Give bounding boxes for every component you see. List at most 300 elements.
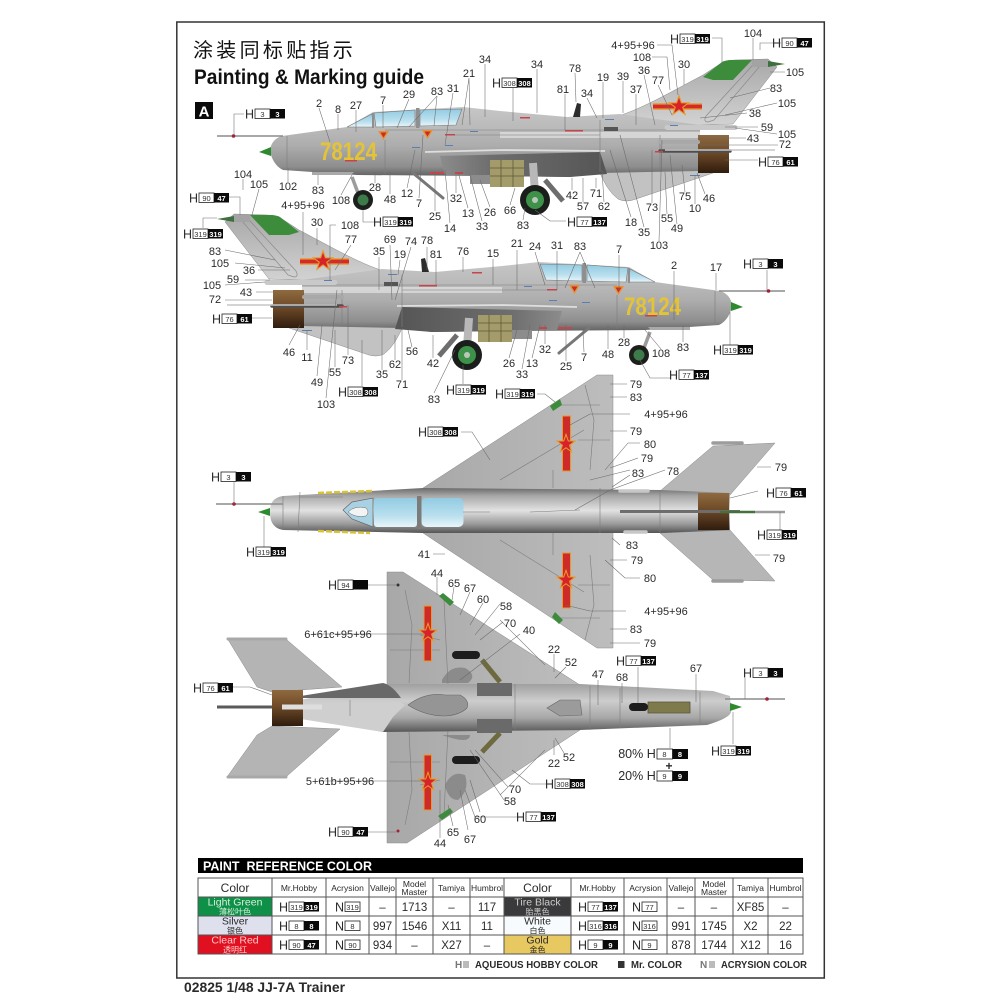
callout numbers side view 1: 49	[671, 223, 683, 235]
chip H308 side view 2: H	[338, 386, 347, 400]
table brand values: –	[678, 902, 685, 914]
chip H3 side view 1: 3	[260, 110, 265, 119]
section badge A: A	[199, 104, 210, 120]
chip H90 underside	[328, 826, 368, 840]
chip H319 fin: H	[670, 32, 679, 46]
chip H77 underside nose wheel: 137	[642, 657, 655, 666]
top view canopy	[343, 496, 464, 529]
callout numbers underside view: 47	[592, 669, 604, 681]
underside intake boxes	[477, 683, 512, 733]
table title bar	[198, 858, 803, 874]
callout numbers underside view: 67	[690, 663, 702, 675]
chip H308 top view: 308	[429, 428, 442, 437]
chip H3 top view: H	[211, 470, 220, 484]
colour names: Gold	[526, 934, 549, 946]
chip H3 underside: H	[743, 666, 752, 680]
chip H77 nose wheel side view 2: H	[669, 368, 678, 382]
callout numbers side view 1: 77	[652, 75, 664, 87]
callout numbers top view: 80	[644, 573, 656, 585]
table header: Mr.Hobby	[579, 883, 616, 893]
top view panel lines	[283, 488, 700, 533]
underside gear bay	[648, 702, 690, 713]
legend	[455, 960, 808, 971]
top view upper wing	[423, 375, 613, 490]
callout numbers side view 2: 103	[317, 399, 335, 411]
callout numbers underside view: 22	[548, 758, 560, 770]
footer product name: 02825 1/48 JJ-7A Trainer	[184, 979, 346, 995]
callout numbers side view 1: 27	[350, 100, 362, 112]
callout numbers underside view: 58	[500, 601, 512, 613]
callout numbers side view 2: 17	[710, 262, 722, 274]
callout numbers side view 1: 31	[447, 83, 459, 95]
colour names: 白色	[530, 926, 546, 936]
callout numbers side view 1: 105	[786, 67, 804, 79]
table Mr.Hobby chips: 9	[608, 941, 613, 950]
table brand values: X2	[743, 921, 758, 933]
chip H319 main wheel side view 2: 319	[457, 386, 470, 395]
callout numbers underside view: 52	[565, 657, 577, 669]
chip H3 side view 1: 3	[275, 110, 280, 119]
callout numbers side view 1: 25	[429, 211, 441, 223]
top view nose yellow marks	[318, 491, 372, 533]
table header: Humbrol	[471, 883, 503, 893]
colour names	[208, 896, 561, 954]
callout numbers side view 2: 48	[602, 349, 614, 361]
callout numbers side view 1	[279, 28, 804, 252]
chip H308 underside: H	[545, 778, 554, 792]
table header: Humbrol	[769, 883, 802, 893]
table Acrysion chips: N	[335, 920, 344, 934]
table Acrysion chips: 77	[645, 903, 654, 912]
chip H94: 94	[341, 581, 350, 590]
chip H319 side view 2 fin: 319	[194, 230, 207, 239]
callout numbers side view 1: 34	[531, 59, 543, 71]
chip H308 side view 1: 308	[518, 79, 531, 88]
chip H76 side view 2: 61	[240, 315, 249, 324]
legend: N	[700, 960, 707, 971]
callout numbers underside view: 67	[464, 583, 476, 595]
chip H319 main wheel side view 2: H	[446, 384, 455, 398]
callout numbers top view: 83	[630, 624, 642, 636]
callout numbers side view 2: 43	[240, 287, 252, 299]
legend: ACRYSION COLOR	[721, 960, 808, 971]
chip H3 side view 1: H	[245, 108, 254, 122]
chip H76 exhaust: 76	[771, 158, 780, 167]
chip H90 fin tip: 47	[800, 39, 809, 48]
callout numbers underside view: 70	[504, 618, 516, 630]
callout numbers side view 1: 73	[646, 202, 658, 214]
chip H76 underside	[193, 682, 233, 696]
callout numbers top view: 41	[418, 549, 430, 561]
title block	[193, 39, 424, 89]
top view nose probe and cone	[216, 502, 283, 516]
callout numbers side view 1: 14	[444, 223, 456, 235]
table brand values: X12	[740, 940, 761, 952]
chip H319 top view nose: H	[246, 546, 255, 560]
chip H3 underside	[743, 666, 783, 680]
chip H3 side view 1	[245, 108, 285, 122]
callout numbers side view 1: 46	[703, 193, 715, 205]
section badge A	[195, 102, 213, 120]
chip H90 fin tip: 90	[785, 39, 794, 48]
legend: AQUEOUS HOBBY COLOR	[475, 960, 599, 971]
underside dark ventral side	[288, 683, 401, 698]
callout numbers side view 1: 13	[462, 208, 474, 220]
callout numbers top view: 79	[631, 555, 643, 567]
top view stabilizers	[660, 443, 775, 581]
colour names: Light Green	[208, 896, 263, 908]
underside rear missile and fairing	[217, 706, 322, 708]
legend: H	[455, 960, 462, 971]
table brand values: 117	[478, 902, 496, 914]
callout numbers side view 1: 57	[577, 201, 589, 213]
callout numbers side view 1: 19	[597, 72, 609, 84]
top view upper roundel	[555, 416, 577, 471]
aircraft side view 2	[217, 214, 785, 370]
aircraft side view 1	[217, 59, 785, 215]
chip H90 underside: 90	[341, 828, 350, 837]
callout numbers side view 2: 2	[671, 260, 677, 272]
table Mr.Hobby chips: 8	[294, 922, 299, 931]
chip H308 side view 1: H	[492, 76, 501, 90]
chip H76 underside: H	[193, 682, 202, 696]
chip H3 underside: 3	[773, 669, 778, 678]
callout numbers side view 2: 78	[421, 235, 433, 247]
table Acrysion chips: N	[335, 938, 344, 952]
chip H76 exhaust: H	[758, 156, 767, 170]
chip H77 nose wheel side view 2: 137	[695, 371, 708, 380]
colour mix note: 9	[678, 772, 682, 781]
table brand values: 878	[671, 940, 691, 952]
chip H308 top view: H	[418, 426, 427, 440]
callout numbers top view: 4+95+96	[644, 606, 688, 618]
table Acrysion chips: 319	[346, 903, 359, 912]
callout numbers side view 1: 8	[335, 104, 341, 116]
callout numbers side view 2: 11	[301, 352, 313, 364]
table Mr.Hobby chips: H	[279, 938, 288, 952]
callout numbers side view 2: 49	[311, 377, 323, 389]
callout numbers side view 1: 7	[380, 95, 386, 107]
colour names: 胎黑色	[526, 906, 550, 916]
underside exhaust	[272, 690, 303, 726]
callout numbers underside view: 67	[464, 834, 476, 846]
chip H319 top view tail: 319	[783, 531, 796, 540]
leader lines top view	[234, 384, 780, 643]
chip H77 main wheel	[567, 216, 607, 230]
chip H308 side view 1: 308	[503, 79, 516, 88]
callout numbers side view 1: 39	[617, 71, 629, 83]
callout numbers side view 1: 32	[450, 193, 462, 205]
table header: Tamiya	[438, 883, 465, 893]
callout numbers side view 1: 48	[384, 194, 396, 206]
table Mr.Hobby chips: 90	[292, 941, 301, 950]
table Acrysion chips: 9	[647, 941, 652, 950]
chip H319 fin	[670, 32, 710, 46]
legend: Mr. COLOR	[631, 960, 683, 971]
chip H308 side view 1	[492, 76, 532, 90]
table brand values: 1713	[402, 902, 427, 914]
table brand values: –	[711, 902, 718, 914]
chip H94: H	[328, 578, 337, 592]
table brand values: 22	[779, 921, 792, 933]
chip H76 underside: 76	[206, 684, 215, 693]
table Mr.Hobby chips: H	[279, 920, 288, 934]
table Mr.Hobby chips: 316	[589, 922, 602, 931]
underside tail missiles	[228, 639, 286, 777]
callout numbers side view 2: 4+95+96	[281, 200, 325, 212]
callout numbers side view 1: 55	[661, 213, 673, 225]
chip H90 fin tip	[772, 36, 812, 50]
callout numbers underside view: 52	[563, 752, 575, 764]
callout numbers side view 2: 25	[560, 361, 572, 373]
chip H319 nose wheel	[373, 216, 413, 230]
table brand values: 1745	[701, 921, 727, 933]
table Acrysion chips: 316	[643, 922, 656, 931]
callout numbers side view 2: 62	[389, 359, 401, 371]
chip H77 underside main wheel	[516, 810, 556, 824]
chip H308 side view 2	[338, 386, 378, 400]
colour names: 银色	[227, 926, 243, 936]
chip H319 nose side view 2: H	[713, 344, 722, 358]
chip H90 side view 2: H	[189, 192, 198, 206]
callout numbers top view: 79	[630, 426, 642, 438]
chip H319 nose wheel: 319	[399, 218, 412, 227]
chip H77 underside main wheel: 77	[529, 813, 538, 822]
table brand values: 997	[373, 921, 392, 933]
chip H319 underside nose: 319	[722, 747, 735, 756]
top view wing panel lines	[500, 385, 610, 640]
chip H319 top view nose: 319	[257, 548, 270, 557]
callout numbers top view: 79	[775, 462, 787, 474]
chip H77 nose wheel side view 2	[669, 368, 709, 382]
colour mix note: +	[665, 759, 673, 773]
chip H77 main wheel: 77	[580, 218, 589, 227]
table brand values: 11	[481, 921, 493, 933]
table header: Model	[702, 879, 726, 889]
table brand values: –	[484, 940, 491, 952]
chip H319 side view 2 fin	[183, 228, 223, 242]
chip H319 side view 2 fin: 319	[209, 230, 222, 239]
chip H90 underside: 47	[356, 828, 365, 837]
callout numbers side view 1: 66	[504, 205, 516, 217]
underside nose probe and cone	[725, 697, 785, 711]
colour mix note: 9	[662, 772, 667, 781]
chip H3 side view 2: 3	[758, 260, 763, 269]
chip H319 nose side view 2: 319	[724, 346, 737, 355]
table grid	[198, 878, 803, 954]
callout numbers underside view: 60	[477, 594, 489, 606]
callout numbers side view 1: 72	[779, 139, 791, 151]
table header: Acrysion	[629, 883, 662, 893]
chip H308 side view 2: 308	[364, 388, 377, 397]
callout numbers side view 1: 35	[638, 227, 650, 239]
underside stabilizers	[227, 638, 342, 777]
callout numbers side view 2: 108	[341, 220, 359, 232]
colour mix note: 8	[662, 750, 667, 759]
callout numbers side view 2: 32	[539, 344, 551, 356]
table Mr.Hobby chips: 47	[307, 941, 316, 950]
underside wing shadows	[442, 668, 472, 800]
callout numbers side view 1: 43	[747, 133, 759, 145]
colour mix note	[618, 747, 688, 783]
callout numbers side view 2: 83	[574, 241, 586, 253]
table Mr.Hobby chips: 319	[305, 903, 318, 912]
table brand values: XF85	[737, 902, 764, 914]
callout numbers underside view: 60	[474, 814, 486, 826]
callout numbers side view 1: 103	[650, 240, 668, 252]
callout numbers side view 2: 31	[551, 240, 563, 252]
callout numbers side view 1: 26	[484, 207, 496, 219]
chip H319 top view wing: 319	[506, 390, 519, 399]
table brand values: –	[448, 902, 455, 914]
chip H319 side view 2 fin: H	[183, 228, 192, 242]
callout numbers side view 1: 36	[638, 65, 650, 77]
table Acrysion chips: N	[632, 920, 641, 934]
underside ventral fin	[288, 702, 405, 732]
colour names: White	[524, 916, 551, 928]
colour mix note: 8	[678, 750, 682, 759]
table brand values	[373, 902, 792, 952]
callout numbers side view 1: 102	[279, 181, 297, 193]
table brand values: X27	[441, 940, 462, 952]
callout numbers underside view: 65	[447, 827, 459, 839]
top view fuselage pods	[620, 491, 648, 532]
callout numbers side view 2: 26	[503, 358, 515, 370]
callout numbers side view 2: 77	[345, 234, 357, 246]
leader lines side view 2	[203, 179, 767, 398]
colour swatch cells	[198, 897, 571, 954]
callout numbers side view 2: 56	[406, 346, 418, 358]
chip H319 top view tail: H	[757, 528, 766, 542]
chip H319 main wheel side view 2: 319	[472, 386, 485, 395]
table brand values: 1546	[402, 921, 427, 933]
chip H77 underside main wheel: H	[516, 810, 525, 824]
callout numbers side view 2: 104	[234, 169, 252, 181]
page frame	[177, 22, 824, 978]
chip H3 top view: 3	[226, 473, 231, 482]
top view lower roundel	[555, 553, 577, 608]
colour names: 透明红	[223, 944, 247, 954]
chip H77 underside nose wheel: 77	[629, 657, 638, 666]
chip H319 top view wing: 319	[521, 390, 534, 399]
underside upper roundel	[417, 606, 439, 661]
callout numbers side view 2: 24	[529, 241, 541, 253]
callout numbers side view 2: 74	[405, 236, 417, 248]
callout numbers side view 2: 59	[227, 274, 239, 286]
chip H76 side view 2: H	[212, 312, 221, 326]
chip H76 exhaust	[758, 156, 798, 170]
callout numbers underside view: 44	[434, 838, 446, 850]
chip H90 side view 2: 90	[202, 194, 211, 203]
top view lower wing	[423, 532, 613, 648]
callout numbers top view: 4+95+96	[644, 409, 688, 421]
callout numbers top view: 83	[632, 468, 644, 480]
callout numbers underside view: 40	[523, 625, 535, 637]
chip H319 nose wheel: 319	[384, 218, 397, 227]
aircraft underside view	[217, 572, 785, 843]
callout numbers side view 2: 13	[526, 358, 538, 370]
chip H308 top view: 308	[444, 428, 457, 437]
chip H319 nose wheel: H	[373, 216, 382, 230]
chip H319 nose side view 2: 319	[739, 346, 752, 355]
callout numbers side view 1: 108	[332, 195, 350, 207]
chip H3 top view	[211, 470, 251, 484]
callout numbers top view: 79	[641, 453, 653, 465]
callout numbers side view 2: 35	[376, 369, 388, 381]
callout numbers underside view: 6+61c+95+96	[304, 629, 372, 641]
chip H319 underside nose: 319	[737, 747, 750, 756]
colour mix note: 80% H	[618, 747, 656, 761]
callout numbers underside view: 5+61b+95+96	[306, 776, 374, 788]
callout numbers side view 2: 83	[677, 342, 689, 354]
callout numbers side view 1: 34	[581, 88, 593, 100]
chip H308 side view 2: 308	[349, 388, 362, 397]
underside upper wing	[387, 572, 580, 685]
chip H308 underside	[545, 778, 585, 792]
leader lines	[234, 38, 785, 241]
callout numbers top view: 83	[626, 540, 638, 552]
callout numbers side view 2	[203, 169, 722, 411]
chip H76 exhaust: 61	[786, 158, 795, 167]
underside rear pod	[547, 700, 582, 716]
table Mr.Hobby chips: 77	[591, 903, 600, 912]
table header: Color	[221, 881, 249, 895]
table header: Vallejo	[669, 883, 694, 893]
table Mr.Hobby chips: H	[578, 938, 587, 952]
chip H319 top view tail: 319	[768, 531, 781, 540]
callout numbers top view: 79	[630, 379, 642, 391]
table Mr.Hobby chips: H	[578, 900, 587, 914]
chip H308 underside: 308	[571, 780, 584, 789]
chip H319 nose side view 2	[713, 344, 753, 358]
chip H76 underside: 61	[221, 684, 230, 693]
callout numbers top view: 78	[667, 466, 679, 478]
underside nose wheel	[629, 703, 648, 711]
callout numbers side view 1: 37	[630, 84, 642, 96]
table Mr.Hobby chips	[279, 900, 618, 952]
paint chips	[183, 32, 812, 840]
callout numbers side view 2: 55	[329, 367, 341, 379]
table title bar: PAINT REFERENCE COLOR	[203, 860, 372, 874]
callout numbers side view 1: 38	[749, 108, 761, 120]
chip H90 fin tip: H	[772, 36, 781, 50]
underside main wheels	[452, 651, 480, 764]
table header: Color	[523, 881, 552, 895]
callout numbers side view 2: 15	[487, 248, 499, 260]
callout numbers underside view: 22	[548, 644, 560, 656]
table Acrysion chips: N	[632, 900, 641, 914]
callout numbers side view 2: 30	[311, 217, 323, 229]
callout numbers top view	[418, 379, 787, 650]
callout numbers underside view: 58	[504, 796, 516, 808]
chip H76 top view	[766, 486, 806, 500]
callout numbers side view 1: 42	[566, 190, 578, 202]
table header: Model	[403, 879, 426, 889]
chip H77 underside main wheel: 137	[542, 813, 555, 822]
chip H319 fin: 319	[696, 35, 709, 44]
callout numbers side view 1: 105	[778, 98, 796, 110]
callout numbers side view 2: 36	[243, 265, 255, 277]
serial number 78124: 78124	[320, 138, 377, 166]
callout numbers side view 1: 75	[679, 191, 691, 203]
callout numbers side view 1: 18	[625, 217, 637, 229]
chip H76 side view 2	[212, 312, 252, 326]
english title: Painting & Marking guide	[194, 66, 424, 89]
underside panel lines	[350, 684, 700, 730]
callout numbers side view 1: 81	[557, 84, 569, 96]
callout numbers side view 1: 108	[633, 52, 651, 64]
callout numbers underside view: 68	[616, 672, 628, 684]
